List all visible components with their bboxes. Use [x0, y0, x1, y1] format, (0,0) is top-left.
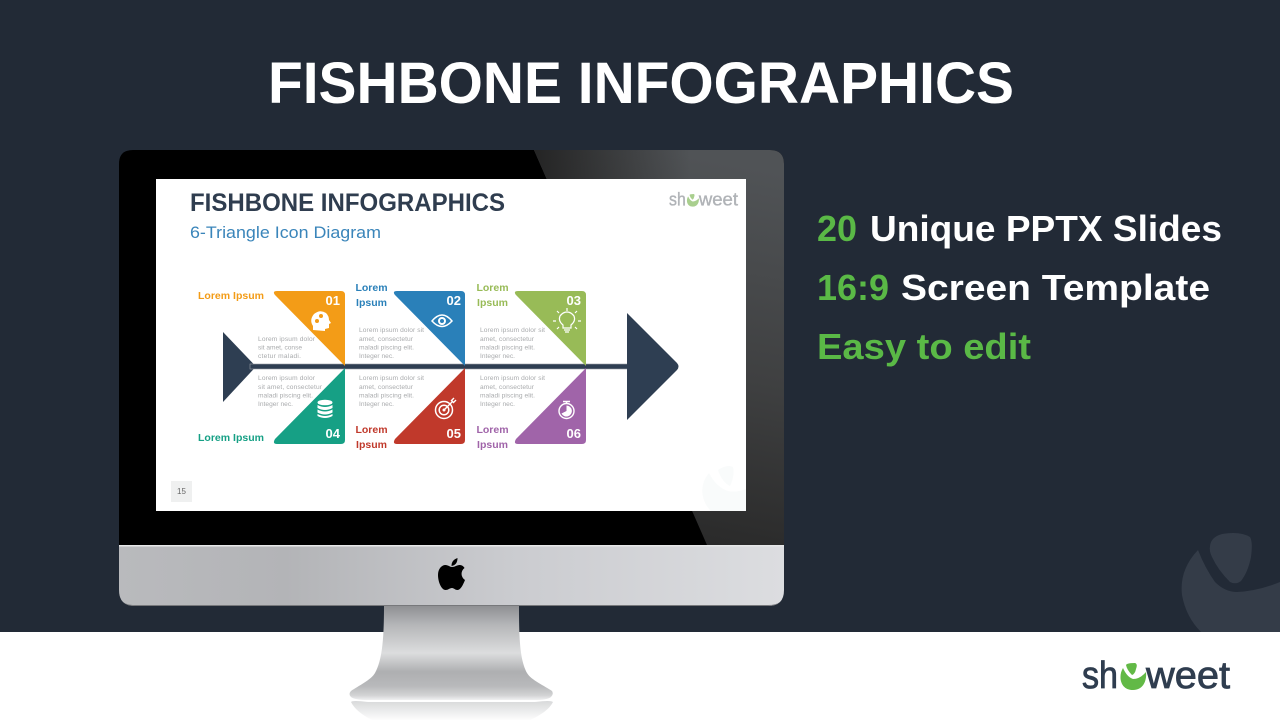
icon: target	[436, 398, 456, 418]
monitor bezel	[119, 150, 784, 545]
icon: head with gears	[311, 311, 331, 331]
item 03: maladi piscing elit.	[480, 344, 535, 352]
bezel glare shading	[534, 150, 707, 545]
slide logo: weet	[698, 190, 738, 210]
item 05: Integer nec.	[359, 401, 394, 408]
item 05: amet, consectetur	[359, 384, 414, 391]
item 05: maladi piscing elit.	[359, 392, 414, 400]
item 05: Lorem ipsum dolor sit	[359, 375, 424, 382]
item 02	[355, 282, 465, 366]
page number: 15	[177, 487, 186, 496]
item 03	[476, 282, 586, 366]
slide title: FISHBONE INFOGRAPHICS	[190, 189, 505, 217]
item 06: amet, consectetur	[480, 384, 535, 391]
item 03: Integer nec.	[480, 353, 515, 360]
feature list: 16:9	[817, 267, 889, 308]
bezel glare	[534, 150, 784, 545]
footer logo	[1082, 655, 1230, 697]
icon: light bulb	[553, 308, 581, 332]
monitor chin	[119, 545, 784, 606]
item 04	[198, 368, 345, 444]
feature list: Screen Template	[901, 267, 1210, 308]
fish head	[627, 313, 678, 420]
title: FISHBONE INFOGRAPHICS	[268, 51, 1014, 116]
item 06: 06	[567, 426, 581, 441]
icon: apple logo	[438, 558, 465, 590]
slide background	[156, 179, 746, 511]
chin bottom shade	[123, 602, 780, 606]
item 03: Lorem	[476, 282, 509, 294]
slide subtitle: 6-Triangle Icon Diagram	[190, 223, 381, 242]
item 06: Lorem ipsum dolor sit	[480, 375, 545, 382]
item 06: Integer nec.	[480, 401, 515, 408]
item 05	[355, 368, 465, 451]
background watermark logo	[1182, 533, 1280, 632]
item 04: maladi piscing elit.	[258, 392, 313, 400]
item 04: Lorem Ipsum	[198, 432, 264, 444]
item 02: 02	[447, 293, 461, 308]
item 04: Integer nec.	[258, 401, 293, 408]
fish spine	[250, 364, 630, 369]
item 05: Lorem	[355, 424, 388, 436]
item 03: 03	[567, 293, 581, 308]
feature list: 20	[817, 208, 857, 249]
monitor	[119, 150, 784, 606]
footer logo: sh	[1082, 655, 1118, 697]
item 06: maladi piscing elit.	[480, 392, 535, 400]
item 02: Integer nec.	[359, 353, 394, 360]
white footer band	[0, 632, 1280, 720]
item 02: Lorem	[355, 282, 388, 294]
item 01: 01	[326, 293, 340, 308]
page number	[171, 481, 192, 502]
item 06	[476, 368, 586, 451]
icon: database	[318, 400, 332, 418]
footer logo: weet	[1145, 655, 1230, 697]
item 01	[198, 290, 345, 366]
feature list: Unique PPTX Slides	[870, 208, 1222, 249]
item 02: Ipsum	[356, 297, 387, 309]
feature list: Easy to edit	[817, 326, 1031, 367]
slide watermark drop	[718, 466, 734, 486]
slide screen	[156, 179, 746, 511]
item 04: sit amet, consectetur	[258, 384, 323, 391]
item 02: amet, consectetur	[359, 336, 414, 343]
item 05: 05	[447, 426, 461, 441]
item 06: Lorem	[476, 424, 509, 436]
item 02: maladi piscing elit.	[359, 344, 414, 352]
icon: stopwatch	[559, 402, 574, 418]
item 03: Ipsum	[477, 297, 508, 309]
item 06: Ipsum	[477, 439, 508, 451]
item 01: Lorem ipsum dolor	[258, 336, 316, 343]
item 01: sit amet, conse	[258, 344, 302, 352]
item 01: Lorem Ipsum	[198, 290, 264, 302]
chin top highlight	[119, 545, 784, 546]
slide logo	[669, 190, 738, 210]
item 01: ctetur maladi.	[258, 353, 301, 360]
slide logo: sh	[669, 190, 686, 210]
icon: eye	[432, 315, 452, 326]
item 03: amet, consectetur	[480, 336, 535, 343]
feature list	[817, 208, 1222, 367]
item 02: Lorem ipsum dolor sit	[359, 327, 424, 334]
monitor stand	[350, 606, 553, 720]
item 04: Lorem ipsum dolor	[258, 375, 316, 382]
item 03: Lorem ipsum dolor sit	[480, 327, 545, 334]
item 05: Ipsum	[356, 439, 387, 451]
slide watermark	[702, 473, 746, 511]
item 04: 04	[326, 426, 341, 441]
fish tail	[223, 332, 256, 402]
